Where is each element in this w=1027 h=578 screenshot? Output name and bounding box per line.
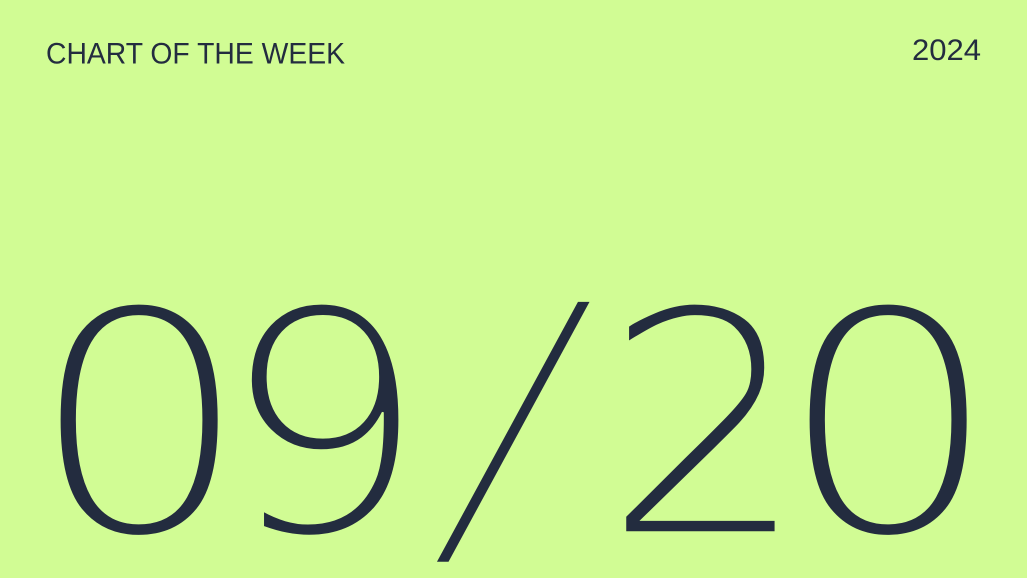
large date: 09/20 [28,239,1000,578]
year: 2024 [912,34,981,67]
heading: chart of the week: CHART OF THE WEEK [46,38,345,70]
